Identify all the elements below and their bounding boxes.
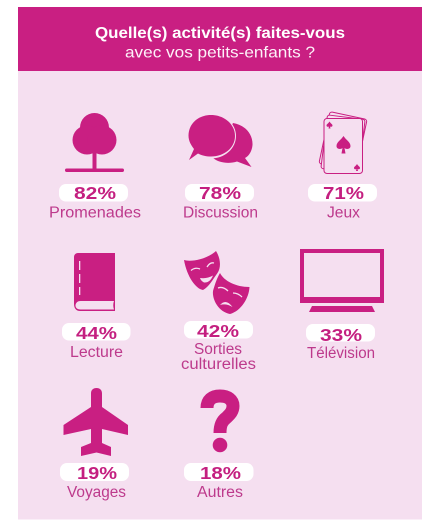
badge: 78%: 78% [199, 183, 242, 203]
subtitle: avec vos petits-enfants ? [125, 44, 315, 62]
badge: 71%: 71% [323, 183, 365, 203]
icon: airplane [64, 388, 128, 456]
icon: book [74, 253, 115, 311]
item: Sorties culturelles [181, 251, 256, 373]
label: Discussion: Discussion [183, 204, 258, 222]
title: Quelle(s) activité(s) faites-vous [95, 25, 345, 42]
label: Sorties culturelles [181, 341, 256, 373]
label: Promenades: Promenades [49, 204, 141, 222]
item: Promenades [49, 113, 141, 222]
icon: speech bubbles [186, 114, 253, 167]
icon: television [300, 249, 384, 312]
icon: theatre masks [184, 251, 250, 314]
item: Télévision [300, 249, 384, 362]
badge: 18%: 18% [200, 463, 242, 483]
badge: 44%: 44% [76, 323, 118, 343]
badge: 33%: 33% [320, 325, 363, 345]
icon: playing cards [319, 112, 367, 174]
label: Sorties culturelles: culturelles [181, 356, 256, 373]
label: Télévision: Télévision [307, 345, 375, 362]
badge: 82%: 82% [74, 183, 117, 203]
item: Jeux [308, 112, 377, 222]
item: Autres [184, 396, 254, 501]
label: Lecture: Lecture [70, 344, 123, 361]
panel: background [18, 71, 422, 520]
icon: question mark [207, 396, 233, 452]
label: Jeux: Jeux [327, 204, 360, 222]
label: Autres: Autres [197, 484, 243, 501]
label: Voyages: Voyages [67, 484, 126, 501]
badge: 42%: 42% [197, 321, 240, 341]
icon: tree [65, 113, 124, 172]
header band [18, 7, 422, 71]
item: Voyages [60, 388, 129, 501]
badge: 19%: 19% [77, 463, 117, 483]
label: Sorties culturelles: Sorties [194, 341, 242, 358]
item: Discussion [183, 114, 258, 222]
item: Lecture [62, 253, 130, 361]
